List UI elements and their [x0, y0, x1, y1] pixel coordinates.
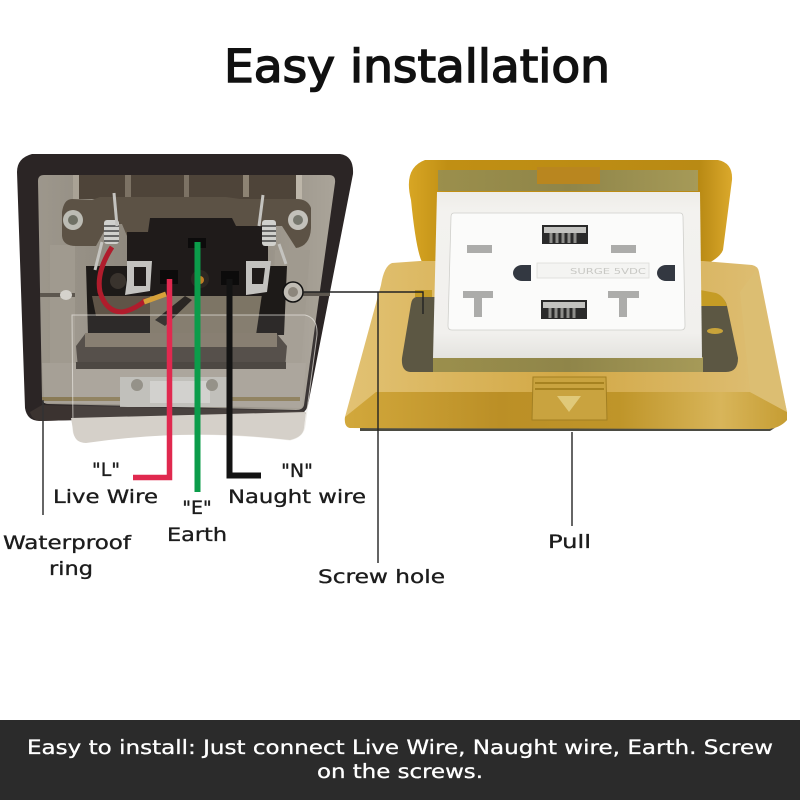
- top recess: [73, 175, 302, 199]
- black socket body: [127, 218, 268, 296]
- label: naught wire: "N": [281, 460, 313, 482]
- screw hole in well: [707, 328, 723, 334]
- label: live wire: Live Wire: [53, 486, 158, 508]
- frame bottom band: [30, 405, 306, 421]
- mounting bracket: [62, 197, 311, 248]
- leader: pull: [571, 432, 573, 526]
- lid back: [409, 160, 732, 266]
- footer banner: [0, 720, 800, 800]
- dark well: [402, 297, 738, 372]
- faceplate: [448, 213, 685, 330]
- socket slots: [463, 245, 639, 317]
- base plate outer: [345, 261, 787, 429]
- faceplate label: SURGE 5VDC: [570, 267, 646, 276]
- label: earth: "E": [182, 497, 212, 519]
- footer text: Easy to install: Just connect Live Wire, Naught wire, Earth. Screw: [27, 736, 773, 759]
- yellow wire: [144, 294, 166, 302]
- title: Easy installation: [224, 40, 610, 93]
- footer text: on the screws.: [317, 760, 483, 783]
- footer text: [27, 736, 773, 783]
- white socket body: [433, 192, 702, 358]
- top strip: [438, 167, 698, 191]
- label: screw hole: Screw hole: [318, 566, 445, 588]
- label: earth: Earth: [167, 524, 227, 546]
- red wire: [99, 247, 146, 312]
- pull tab: [532, 377, 607, 420]
- gold seam: [42, 397, 300, 401]
- photo: socket back with wiring: [17, 154, 353, 443]
- gold well edges: [415, 290, 727, 306]
- label: live wire: "L": [92, 459, 120, 481]
- wire marker: earth (green): [194, 242, 200, 492]
- label: pull: Pull: [548, 531, 591, 553]
- springs: [104, 220, 276, 246]
- faceplate label: [537, 263, 649, 278]
- film tail: [71, 412, 306, 443]
- photo: gold floor socket: [345, 160, 787, 431]
- wire marker: neutral (black): [230, 279, 261, 476]
- spring arms: [95, 193, 286, 270]
- metal clip right: [246, 261, 271, 295]
- label: naught wire: [228, 460, 366, 508]
- usb port top: [542, 225, 588, 244]
- label: earth: [167, 497, 227, 546]
- label: waterproof ring: Waterproof: [3, 532, 133, 554]
- centre plate: [120, 377, 227, 407]
- leader: waterproof ring: [42, 400, 44, 515]
- centre screw: [191, 270, 209, 288]
- base plate shadow: [360, 420, 787, 431]
- screw hole marker: [283, 282, 303, 302]
- label: live wire: [53, 459, 158, 508]
- metal clip left: [125, 261, 152, 295]
- bottom strip: [433, 357, 703, 372]
- inner metal housing: [38, 175, 335, 410]
- leader: screw hole: [303, 292, 423, 563]
- transparent film: [72, 315, 317, 441]
- lower dark band: [76, 334, 287, 368]
- small hole: [60, 290, 72, 300]
- terminal blocks: [160, 238, 239, 285]
- frame: waterproof ring: [17, 154, 353, 421]
- right bevel highlight: [740, 270, 787, 412]
- wire marker: live (red): [133, 279, 170, 478]
- left screw: [63, 210, 83, 230]
- label: waterproof ring: ring: [49, 558, 93, 580]
- right screw: [288, 210, 308, 230]
- ground holes: [513, 265, 675, 281]
- lower housing: [42, 363, 306, 408]
- side plate shadows: [50, 245, 310, 380]
- label: waterproof ring: [3, 532, 133, 580]
- front bevel: [345, 392, 787, 429]
- pull arrow: [557, 396, 581, 412]
- usb port bottom: [541, 300, 587, 319]
- dark cavity: [86, 266, 287, 335]
- label: naught wire: Naught wire: [228, 486, 366, 508]
